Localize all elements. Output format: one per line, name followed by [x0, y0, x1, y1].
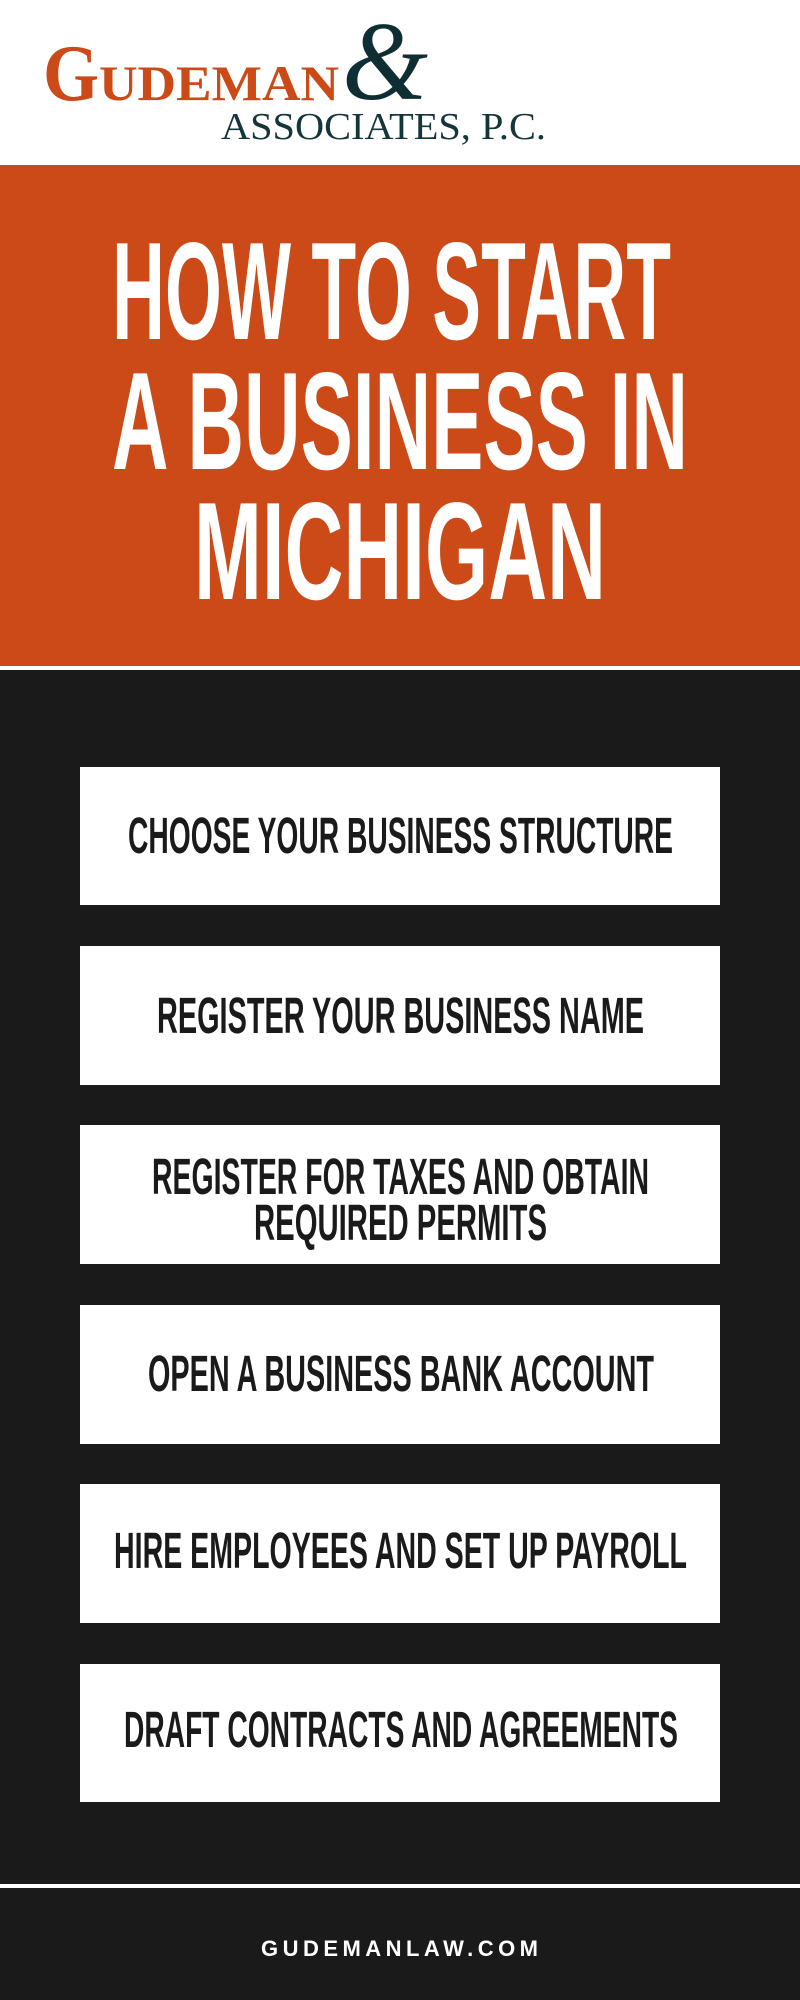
step 5 [80, 1484, 720, 1623]
step 1 [80, 767, 720, 905]
title text [112, 214, 688, 629]
divider above footer [0, 1884, 800, 1888]
logo wordmark: Gudeman: UDEMAN [99, 55, 339, 111]
logo wordmark: Gudeman: G [43, 30, 99, 118]
step 3 [80, 1125, 720, 1264]
step 2 [80, 946, 720, 1085]
step 6 [80, 1664, 720, 1802]
footer url: GUDEMANLAW.COM [261, 1936, 538, 1961]
step 3: REQUIRED PERMITS [254, 1194, 547, 1251]
logo subline: Associates, P.C.: ASSOCIATES, P.C. [221, 106, 546, 148]
header: logo [0, 0, 800, 165]
logo ampersand: & [342, 0, 428, 124]
title band [0, 165, 800, 666]
divider under title [0, 666, 800, 670]
steps panel [80, 767, 720, 1802]
step 4 [80, 1305, 720, 1444]
